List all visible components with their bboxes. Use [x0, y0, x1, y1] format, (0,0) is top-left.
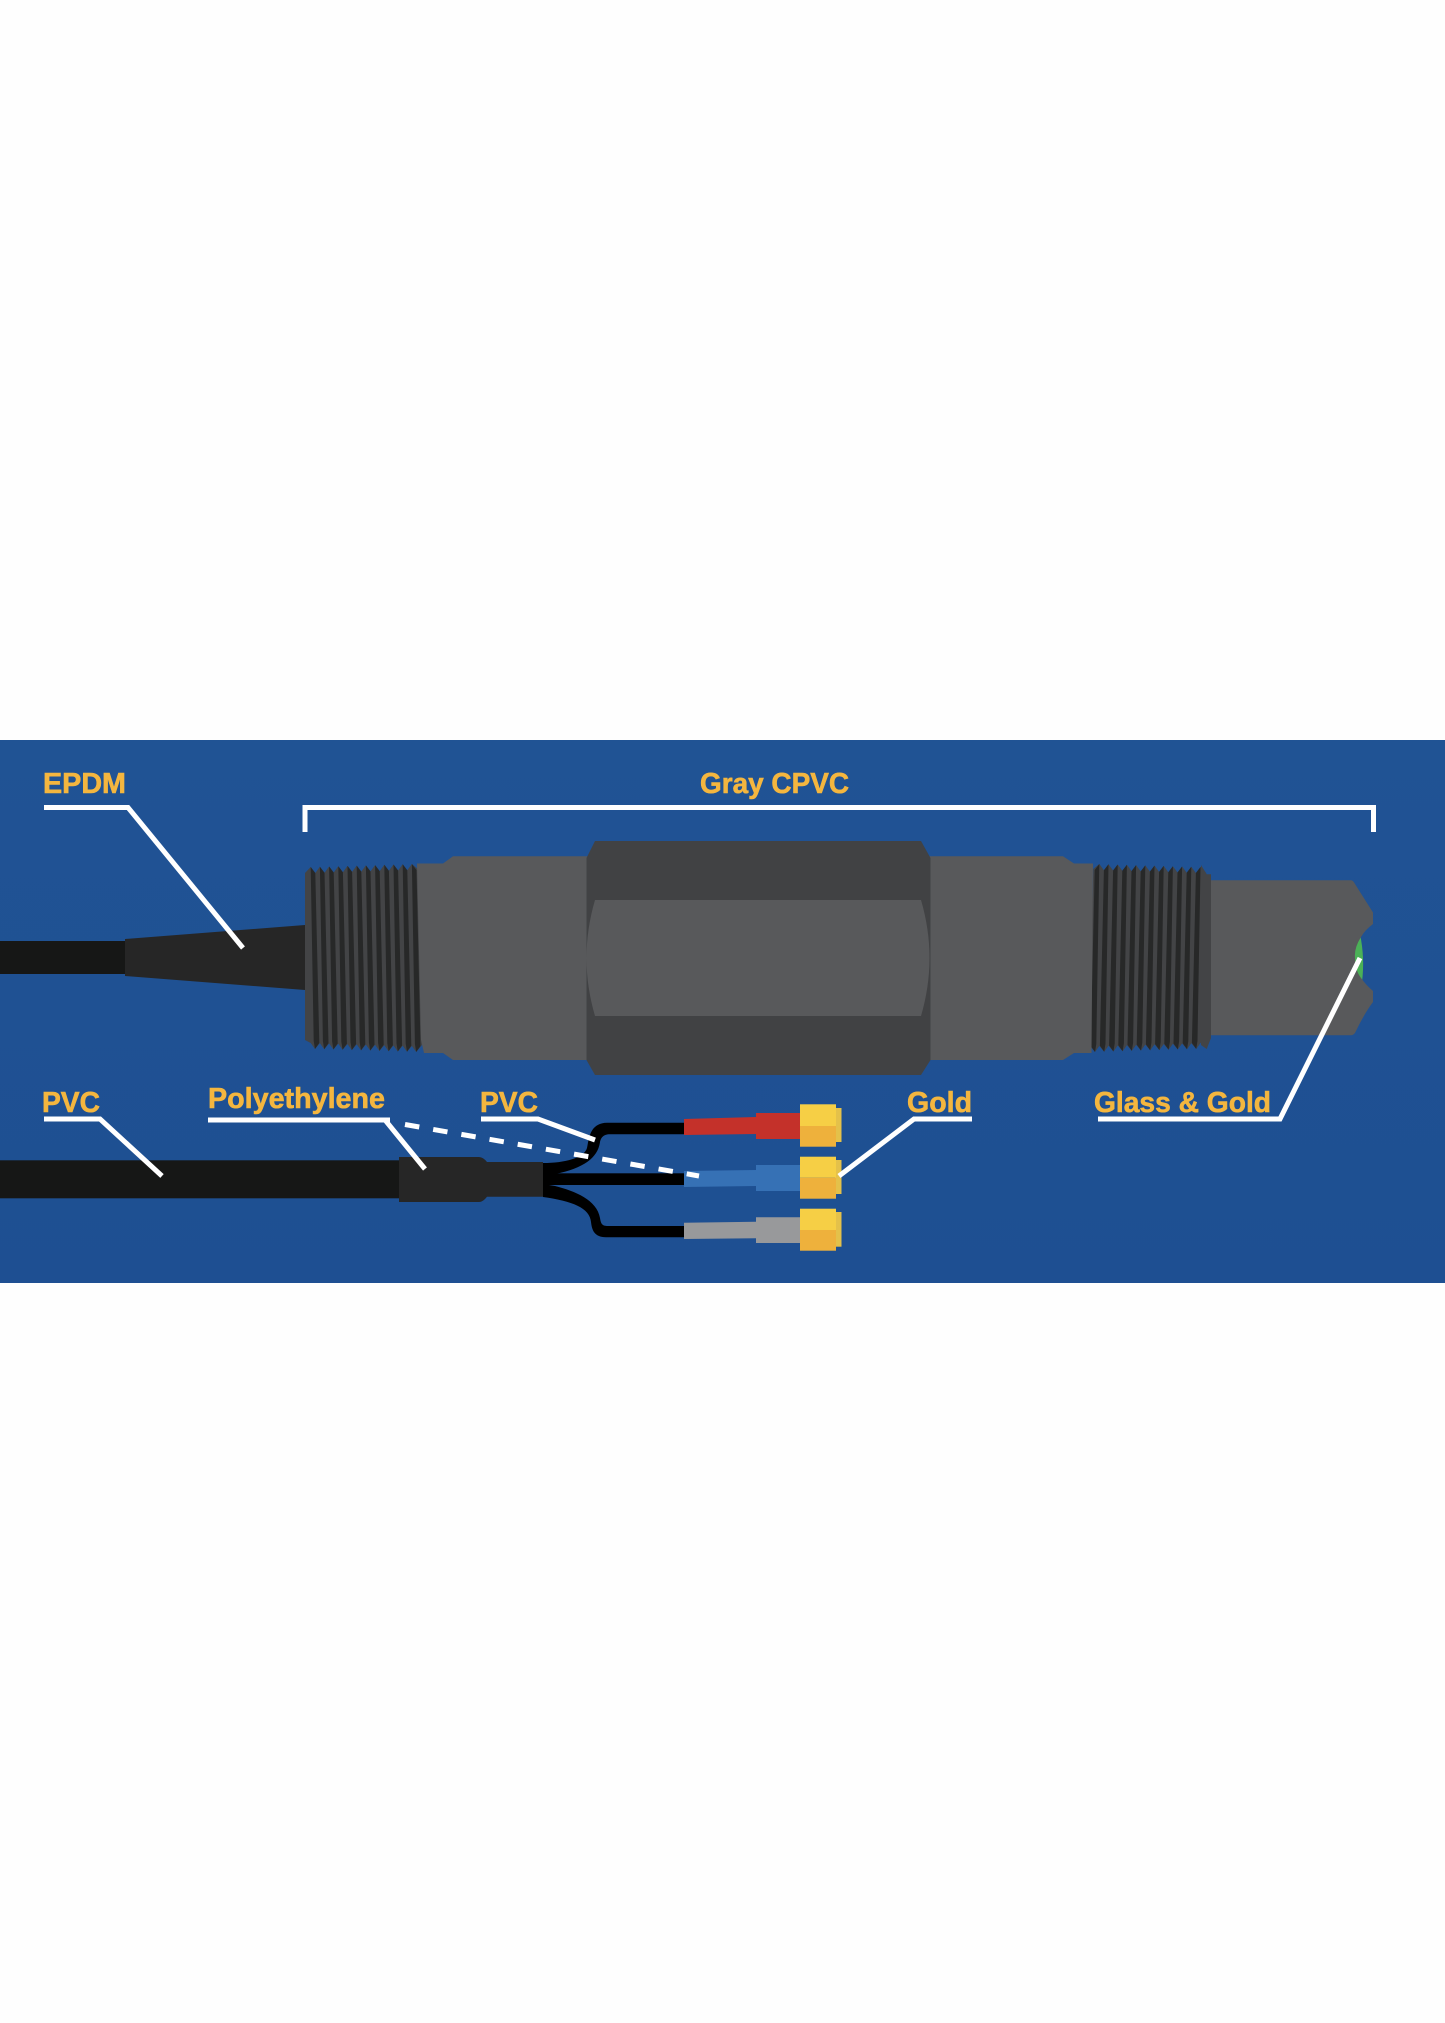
- black wires: [543, 1123, 684, 1237]
- bracket: Gray CPVC: [305, 808, 1374, 832]
- leader line: Polyethylene: [208, 1120, 425, 1169]
- label: EPDM: EPDM: [43, 768, 126, 800]
- leader line: PVC cable: [44, 1119, 162, 1176]
- leader line: Gold: [839, 1119, 972, 1176]
- label: Polyethylene: Polyethylene: [208, 1083, 385, 1115]
- label: Gray CPVC: Gray CPVC: [700, 768, 849, 800]
- label: Gold: Gold: [907, 1087, 972, 1119]
- right thread: [1089, 864, 1211, 1052]
- label: Glass & Gold: Glass & Gold: [1094, 1087, 1271, 1119]
- probe cable: EPDM section: [0, 925, 305, 990]
- panel: blue background: [0, 740, 1445, 1283]
- label: PVC wires: PVC: [480, 1087, 538, 1119]
- right collar: [925, 856, 1093, 1060]
- red connector: [684, 1104, 842, 1147]
- green glass sensor tip: [1350, 934, 1363, 982]
- blue connector: [684, 1157, 842, 1199]
- probe tip: [1211, 880, 1373, 1035]
- leader line: Glass & Gold: [1098, 958, 1360, 1119]
- left collar: [417, 856, 590, 1060]
- leader line: PVC wires: [481, 1119, 595, 1140]
- probe body: gray CPVC: [305, 841, 1373, 1075]
- hex nut: [586, 841, 930, 1075]
- gray connector: [684, 1209, 842, 1251]
- label: PVC cable: PVC: [42, 1087, 100, 1119]
- left thread: [305, 864, 422, 1052]
- dashed leader line: Polyethylene to blue wire: [405, 1124, 699, 1176]
- cable with polyethylene sleeve: [0, 1157, 543, 1202]
- leader line: EPDM: [44, 808, 243, 948]
